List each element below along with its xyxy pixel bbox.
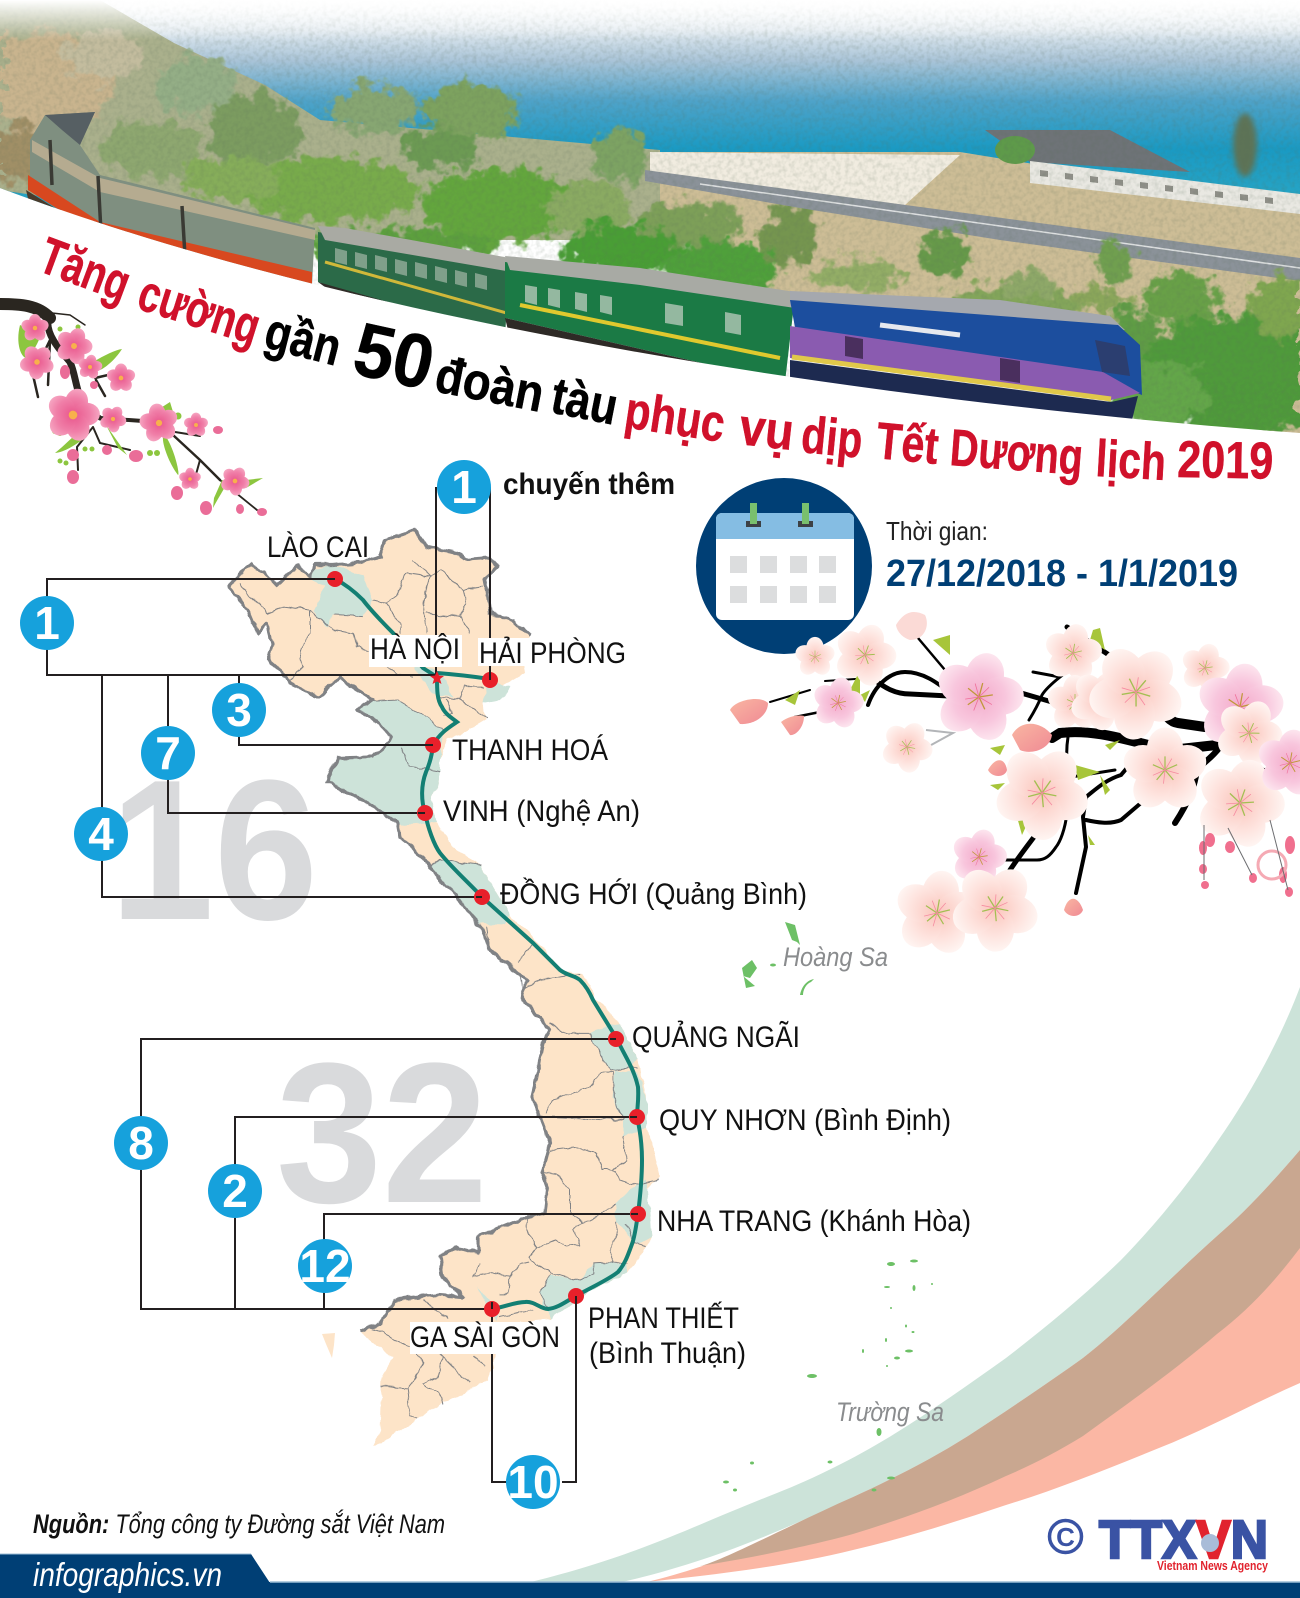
logo: TTXVN: TTXVN bbox=[1099, 1510, 1268, 1570]
city labels: HẢI PHÒNG bbox=[479, 636, 626, 670]
connector lines bbox=[47, 487, 638, 1482]
green coach 1 bbox=[318, 232, 510, 335]
short line ends over markers bbox=[320, 579, 638, 1309]
blossom branch: left bbox=[0, 304, 267, 516]
title: tàu bbox=[547, 367, 623, 437]
date range: 27/12/2018 - 1/1/2019 bbox=[886, 553, 1238, 595]
province borders south bbox=[373, 1023, 658, 1420]
title: Tết bbox=[874, 412, 941, 476]
title: gần bbox=[259, 302, 347, 378]
station markers bbox=[327, 571, 646, 1317]
title: Dương bbox=[948, 419, 1085, 487]
badge 1 top bbox=[437, 460, 491, 514]
white beach and road bbox=[650, 152, 960, 205]
islands: Hoang Sa bbox=[742, 922, 814, 995]
city labels: ĐỒNG HỚI (Quảng Bình) bbox=[500, 877, 807, 911]
logo: TTXVN: C bbox=[1056, 1522, 1075, 1552]
highlighted provinces bbox=[311, 565, 652, 1320]
province borders north bbox=[240, 560, 580, 990]
badge 7: 7 bbox=[155, 727, 181, 779]
badge 1 left bbox=[20, 596, 74, 650]
badge 1 left: 1 bbox=[34, 597, 60, 649]
sea and sky bbox=[0, 0, 1300, 210]
label: Truong Sa: Trường Sa bbox=[836, 1397, 944, 1427]
city labels: VINH (Nghệ An) bbox=[443, 795, 640, 828]
title: cường bbox=[131, 264, 267, 357]
city labels bbox=[267, 531, 971, 1370]
rear coaches bbox=[30, 112, 315, 285]
badge 8: 8 bbox=[128, 1117, 154, 1169]
title: 2019 bbox=[1177, 431, 1274, 491]
badge 8 bbox=[114, 1116, 168, 1170]
western border bbox=[228, 528, 550, 1332]
islands: Truong Sa bbox=[723, 1260, 933, 1492]
seawall and buildings bbox=[985, 130, 1190, 172]
time label: Thời gian: bbox=[886, 516, 988, 546]
city labels: LÀO CAI bbox=[267, 531, 369, 564]
photo: train along the coast bbox=[0, 0, 1300, 440]
mainland bbox=[228, 528, 660, 1447]
title: 50 bbox=[346, 307, 442, 407]
title: vụ bbox=[737, 398, 797, 462]
top fade bbox=[0, 0, 1300, 40]
title: lịch bbox=[1094, 430, 1168, 492]
badge 4: 4 bbox=[88, 808, 114, 860]
city labels: QUẢNG NGÃI bbox=[632, 1020, 800, 1054]
island: Phu Quoc bbox=[322, 1333, 335, 1358]
brown band bbox=[700, 1150, 1300, 1566]
blossom branch: right bbox=[730, 612, 1300, 973]
icon: calendar bbox=[696, 478, 872, 654]
swoosh: bottom-right decoration bbox=[531, 987, 1300, 1582]
title bbox=[32, 227, 1274, 492]
title: Tăng bbox=[32, 227, 138, 313]
white label backgrounds bbox=[369, 635, 628, 1354]
city labels: PHAN THIẾT bbox=[588, 1301, 739, 1335]
big number 32: 32 bbox=[276, 1022, 488, 1245]
city labels: NHA TRANG (Khánh Hòa) bbox=[657, 1205, 971, 1238]
badge 1 top: 1 bbox=[451, 461, 477, 513]
badge 4 bbox=[74, 807, 128, 861]
logo: TTXVN: Vietnam News Agency bbox=[1157, 1558, 1269, 1573]
title: dịp bbox=[799, 406, 865, 470]
city labels: HÀ NỘI bbox=[370, 632, 460, 666]
green coach 2 bbox=[505, 262, 795, 382]
label: Hoang Sa: Hoàng Sa bbox=[783, 942, 888, 972]
badge 2: 2 bbox=[222, 1165, 248, 1217]
big number 16: 16 bbox=[110, 739, 318, 962]
hillside bbox=[0, 0, 660, 240]
green band bbox=[531, 987, 1300, 1582]
locomotive bbox=[790, 291, 1125, 330]
badge 10: 10 bbox=[507, 1456, 559, 1508]
footer bar bbox=[0, 1554, 1300, 1598]
city labels: QUY NHƠN (Bình Định) bbox=[659, 1104, 951, 1137]
label: chuyến thêm: chuyến thêm bbox=[503, 468, 675, 501]
title: phục bbox=[621, 382, 729, 454]
badge 12: 12 bbox=[299, 1240, 351, 1292]
number badges bbox=[20, 460, 560, 1509]
badge 7 bbox=[141, 726, 195, 780]
map of Vietnam bbox=[228, 528, 660, 1447]
badge 3 bbox=[212, 683, 266, 737]
title: đoàn bbox=[431, 346, 549, 424]
photo grain bbox=[0, 90, 1300, 440]
shore land bbox=[640, 152, 1300, 440]
city labels: THANH HOÁ bbox=[452, 734, 608, 767]
badge 2 bbox=[208, 1164, 262, 1218]
railway line bbox=[335, 579, 642, 1309]
city labels: GA SÀI GÒN bbox=[410, 1321, 560, 1354]
bushes on the right slope bbox=[815, 229, 1300, 437]
source: Nguồn: Tổng công ty Đường sắt Việt Nam bbox=[33, 1508, 445, 1539]
badge 3: 3 bbox=[226, 684, 252, 736]
website: infographics.vn bbox=[33, 1556, 222, 1593]
salmon band bbox=[647, 1150, 1300, 1582]
vegetation left bbox=[0, 30, 818, 298]
city labels: (Bình Thuận) bbox=[589, 1337, 746, 1370]
